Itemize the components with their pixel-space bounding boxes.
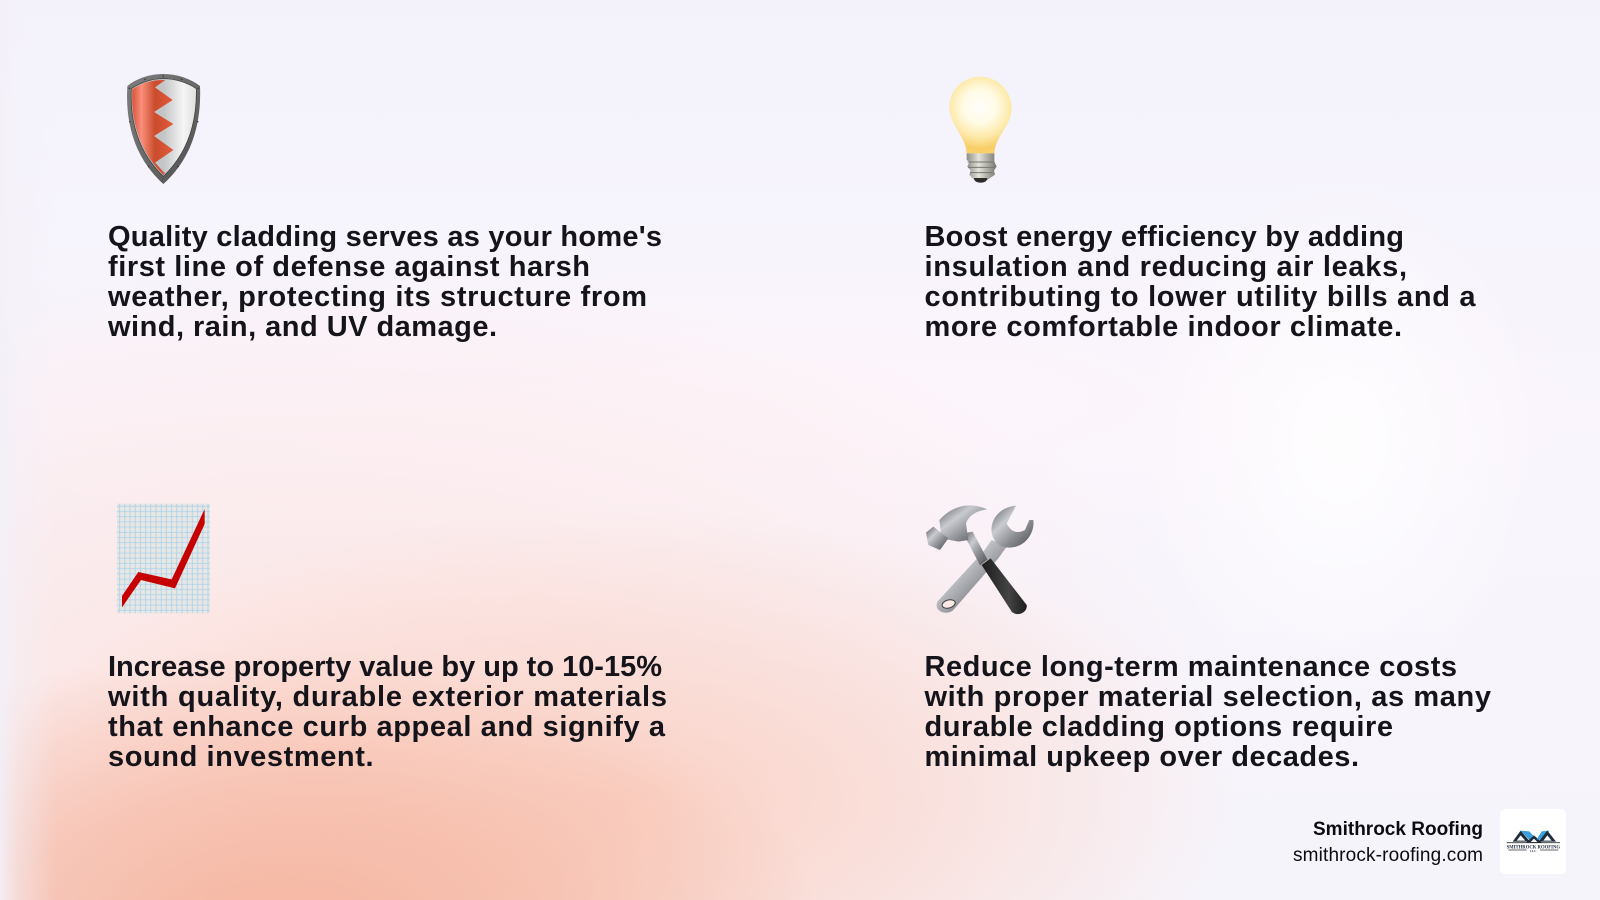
text: property value: with quality, durable exterior materials [107, 681, 667, 713]
company name: Smithrock Roofing [1313, 819, 1483, 840]
panel: weather protection [107, 74, 662, 343]
text: weather protection [107, 221, 662, 343]
icon: rising chart [117, 504, 210, 613]
logo card: SMITHROCK ROOFING [1507, 845, 1560, 850]
text: property value [107, 651, 667, 773]
text: weather protection: wind, rain, and UV damage. [107, 311, 497, 343]
text: weather protection: Quality cladding serves as your home's [108, 221, 662, 253]
text: energy efficiency: Boost energy efficiency by adding [924, 221, 1404, 253]
logo card: LLC [1530, 849, 1536, 853]
website: smithrock-roofing.com [1293, 845, 1483, 866]
text: maintenance costs [924, 651, 1491, 773]
icon: light bulb [949, 77, 1012, 183]
panel: property value [107, 504, 667, 773]
text: weather protection: weather, protecting its structure from [107, 281, 647, 313]
panel: energy efficiency [924, 77, 1476, 343]
icon: hammer and wrench [926, 505, 1034, 614]
text: maintenance costs: minimal upkeep over decades. [924, 741, 1359, 773]
text: property value: that enhance curb appeal and signify a [108, 711, 666, 743]
panel: maintenance costs [924, 505, 1491, 773]
text: maintenance costs: durable cladding options require [924, 711, 1393, 743]
text: weather protection: first line of defense against harsh [108, 251, 590, 283]
text: energy efficiency: more comfortable indoor climate. [924, 311, 1402, 343]
text: maintenance costs: with proper material selection, as many [924, 681, 1491, 713]
icon: shield [123, 74, 200, 184]
text: property value: sound investment. [108, 741, 374, 773]
text: energy efficiency: insulation and reducing air leaks, [924, 251, 1407, 283]
text: maintenance costs: Reduce long-term maintenance costs [924, 651, 1457, 683]
logo card [1500, 809, 1566, 874]
footer: brand [1293, 809, 1566, 874]
text: property value: Increase property value by up to 10-15% [108, 651, 662, 683]
text: energy efficiency [924, 221, 1476, 343]
text: energy efficiency: contributing to lower utility bills and a [924, 281, 1476, 313]
